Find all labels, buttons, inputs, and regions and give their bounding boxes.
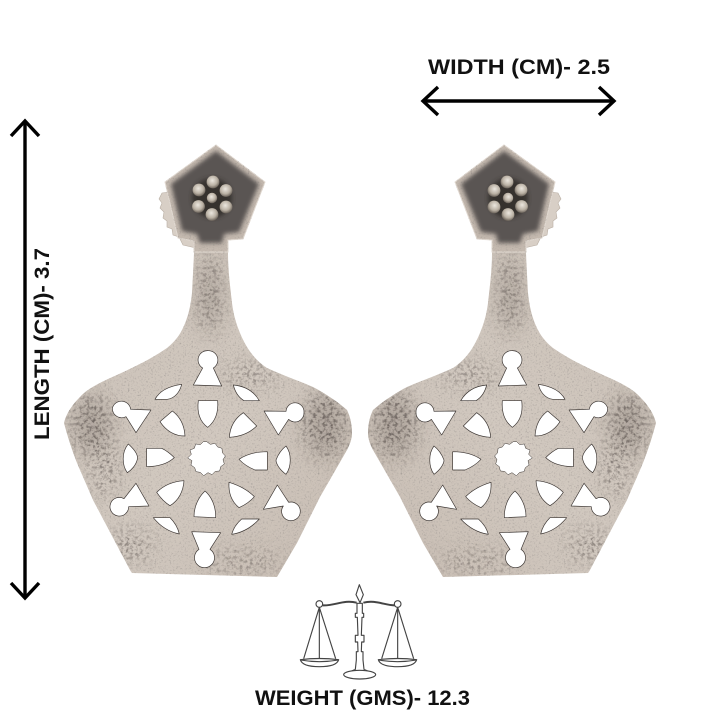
left earring bbox=[64, 145, 352, 577]
right earring bbox=[368, 145, 656, 577]
width arrow bbox=[423, 87, 614, 115]
scale beam bbox=[323, 602, 397, 605]
length label: LENGTH (CM)- 3.7 bbox=[31, 248, 54, 440]
column bbox=[349, 603, 370, 672]
length arrow bbox=[11, 121, 39, 598]
finial bbox=[356, 585, 363, 603]
right pan and strings bbox=[382, 607, 414, 659]
width label: WIDTH (CM)- 2.5 bbox=[428, 56, 610, 79]
icon: balance scale bbox=[300, 585, 417, 679]
weight label: WEIGHT (GMS)- 12.3 bbox=[255, 687, 470, 710]
left pan and strings bbox=[304, 607, 336, 659]
